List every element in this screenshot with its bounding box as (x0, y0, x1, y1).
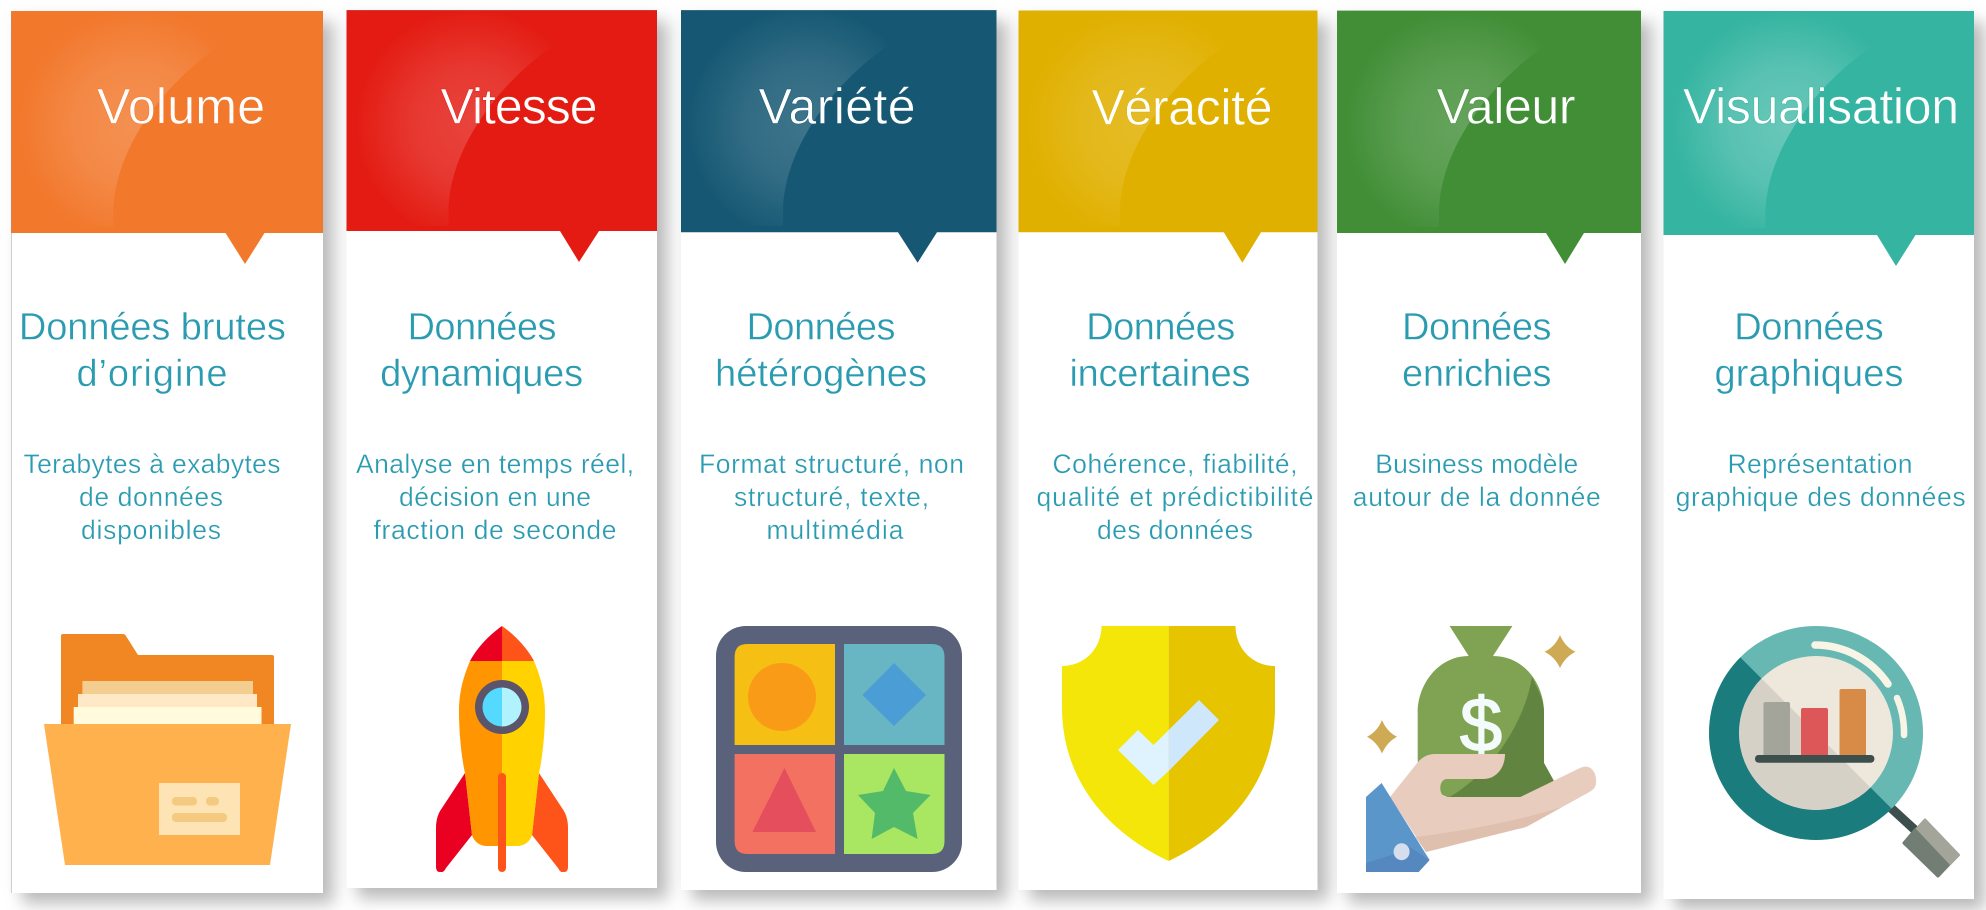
description: Analyse en temps réel, (356, 449, 634, 479)
panel: Volume (11, 11, 323, 893)
subtitle (715, 306, 927, 395)
header banner with pointer (346, 10, 657, 262)
panel: Visualisation (1664, 11, 1974, 899)
icon: rocket (436, 626, 568, 872)
header gloss (346, 10, 578, 226)
description: Format structuré, non (699, 449, 964, 479)
header banner with pointer (681, 10, 996, 263)
subtitle (1714, 306, 1904, 395)
header banner with pointer (1664, 11, 1974, 266)
subtitle: Données brutes (19, 306, 286, 348)
description (356, 449, 634, 545)
description (1353, 449, 1601, 512)
title: Véracité (1092, 79, 1272, 135)
subtitle: Données (1086, 306, 1235, 348)
subtitle: Données (1734, 306, 1884, 348)
description: Business modèle (1375, 449, 1578, 479)
subtitle: incertaines (1070, 353, 1250, 395)
description (1036, 449, 1314, 545)
subtitle: dynamiques (380, 353, 583, 395)
title: Vitesse (440, 78, 598, 134)
header gloss (1018, 10, 1250, 226)
subtitle: d’origine (76, 353, 228, 395)
icon: money bag in hand: $ (1460, 683, 1502, 768)
title: Volume (97, 78, 265, 134)
icon: shield (1062, 626, 1275, 861)
description: Terabytes à exabytes (24, 449, 280, 479)
icon: shapes grid (716, 626, 962, 872)
subtitle: hétérogènes (715, 353, 927, 395)
subtitle (380, 306, 583, 395)
description (24, 449, 280, 545)
subtitle: enrichies (1402, 353, 1552, 395)
header gloss (1664, 12, 1896, 228)
description: Cohérence, fiabilité, (1052, 449, 1298, 479)
description: fraction de seconde (374, 515, 616, 545)
header gloss (1337, 11, 1569, 227)
header banner with pointer (1337, 11, 1641, 264)
title: Variété (758, 78, 916, 134)
card background (681, 10, 996, 890)
subtitle: Données (746, 306, 896, 348)
header gloss (681, 10, 913, 226)
card background (1337, 11, 1641, 893)
description: disponibles (81, 515, 221, 545)
card background (11, 11, 323, 893)
description: graphique des données (1676, 482, 1966, 512)
description: Représentation (1728, 449, 1912, 479)
subtitle: graphiques (1714, 353, 1904, 395)
panel: Véracité (1018, 10, 1318, 890)
card background (346, 10, 657, 888)
panel: Variété (681, 10, 996, 890)
description: de données (79, 482, 223, 512)
description (1676, 449, 1966, 512)
icon: magnifier with bar chart (1709, 626, 1958, 876)
panel: Valeur (1337, 11, 1641, 893)
description: des données (1097, 515, 1253, 545)
description: décision en une (399, 482, 591, 512)
description (699, 449, 964, 545)
subtitle (1402, 306, 1552, 395)
description: qualité et prédictibilité (1036, 482, 1314, 512)
title: Valeur (1436, 78, 1576, 134)
subtitle: Données (408, 306, 556, 348)
header banner with pointer (11, 11, 323, 264)
icon: money bag in hand (1366, 626, 1596, 872)
header banner with pointer (1018, 10, 1318, 263)
subtitle: Données (1402, 306, 1552, 348)
description: multimédia (766, 515, 904, 545)
panel: Vitesse (346, 10, 657, 888)
card background (1018, 10, 1318, 890)
description: autour de la donnée (1353, 482, 1601, 512)
subtitle (1070, 306, 1250, 395)
card background (1664, 11, 1974, 899)
subtitle (19, 306, 286, 395)
description: structuré, texte, (734, 482, 929, 512)
header gloss (11, 11, 243, 227)
icon: folder (44, 634, 291, 865)
title: Visualisation (1683, 78, 1959, 134)
